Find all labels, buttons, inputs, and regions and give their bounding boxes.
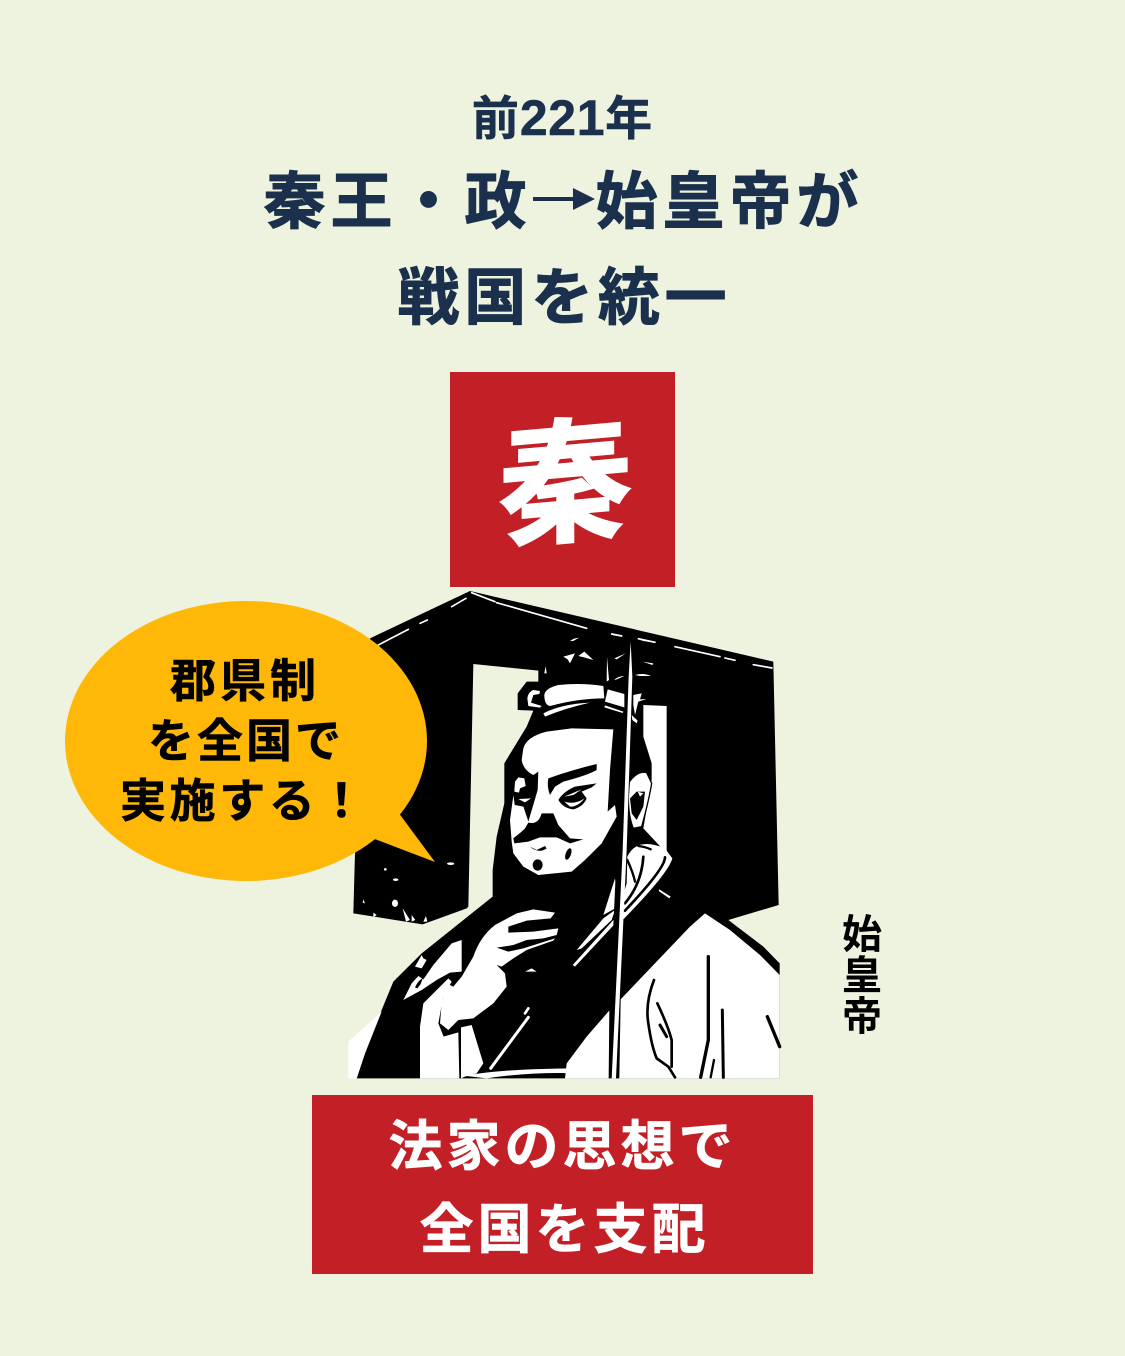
right robe	[565, 913, 780, 1078]
left lower cloth	[348, 1012, 382, 1078]
speckles	[363, 862, 454, 922]
red panel: Qin character: 秦	[498, 405, 632, 566]
heading: title line 2: 戦国を統一	[397, 264, 732, 333]
red panel: legalism caption	[312, 1095, 813, 1274]
caption line 1: 法家の思想で	[388, 1117, 736, 1177]
crown details	[527, 634, 655, 723]
bubble shape	[65, 601, 435, 881]
speech bubble	[65, 601, 435, 881]
bubble text line 3: 実施する！	[120, 775, 368, 827]
crown and right window	[527, 634, 667, 853]
bubble text line 1: 郡県制	[170, 655, 320, 707]
robe folds	[647, 957, 780, 1077]
staff	[609, 840, 626, 1078]
face	[510, 728, 652, 875]
arrow in title	[533, 188, 595, 210]
roof highlights	[378, 593, 772, 668]
sleeve curl	[415, 978, 423, 988]
right window	[643, 705, 667, 853]
heading: year: 前221年	[472, 90, 653, 146]
bubble text line 2: を全国で	[148, 715, 344, 767]
sleeve pieces	[403, 940, 580, 1078]
hand and sleeve	[403, 909, 580, 1078]
silhouette	[353, 591, 780, 1078]
lower body, offset group	[348, 840, 780, 1078]
red panel: Qin character	[450, 372, 675, 587]
heading: title line 1: 秦王・政 始皇帝が	[263, 168, 864, 237]
face highlights	[510, 777, 584, 845]
ear	[628, 772, 652, 828]
staff highlight	[612, 642, 632, 1078]
face shadows	[512, 760, 597, 871]
collar	[573, 844, 672, 967]
heading block	[263, 90, 864, 333]
caption line 2: 全国を支配	[420, 1200, 710, 1260]
stick	[491, 1008, 528, 1068]
portrait caption: 始皇帝	[836, 913, 880, 1036]
